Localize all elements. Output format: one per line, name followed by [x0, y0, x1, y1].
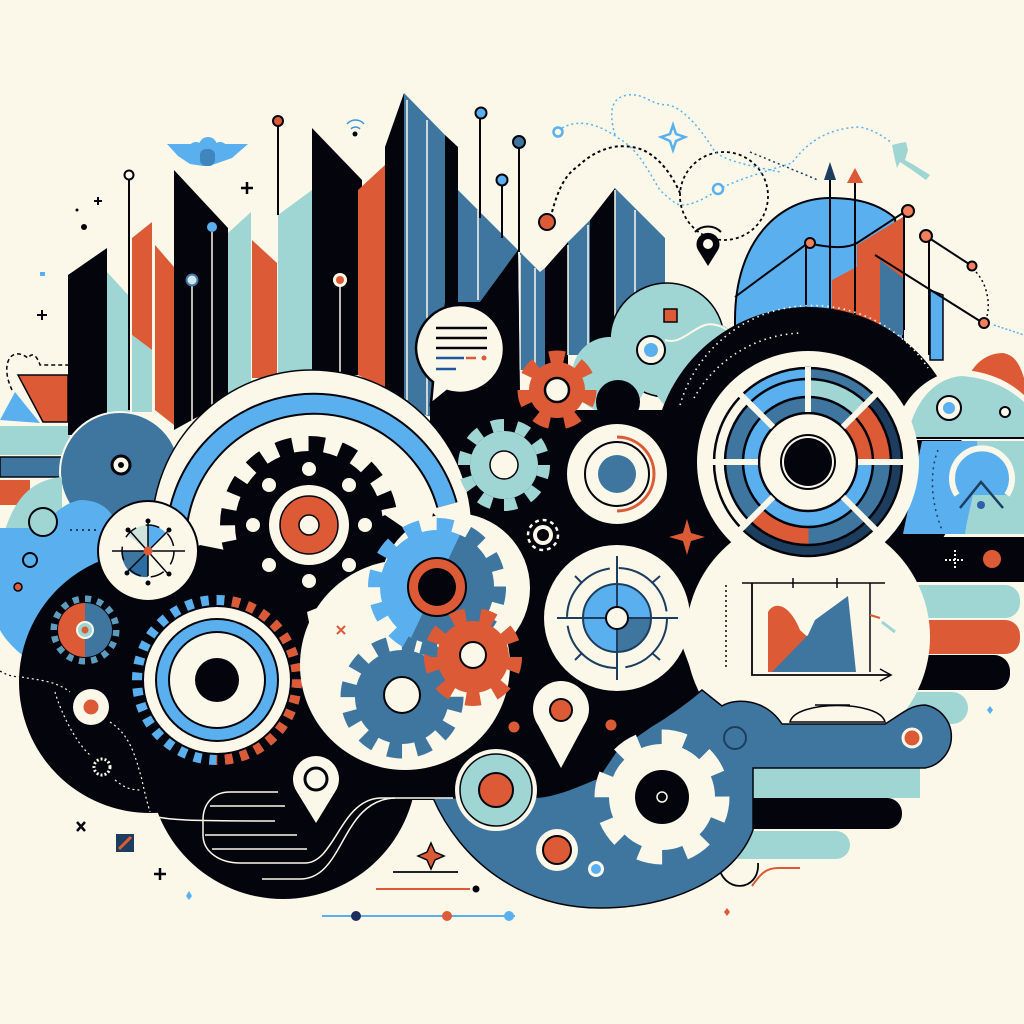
pill under chart	[790, 705, 885, 722]
small ring gear	[528, 520, 558, 550]
speech bubble	[416, 305, 504, 404]
icon: map pin top	[695, 226, 721, 266]
left stripes and triangle	[0, 354, 70, 505]
bottom timeline	[322, 911, 515, 921]
dotted routes top right	[539, 95, 1024, 335]
concentric dot	[455, 749, 537, 831]
icon: mint gear	[464, 425, 544, 505]
panel: mint cloud behind wheel	[572, 283, 750, 420]
black mass	[19, 250, 963, 899]
panel: left blobs	[0, 412, 180, 660]
icon: steel gear	[348, 643, 456, 751]
right stripes	[880, 585, 1020, 724]
target gear left	[137, 600, 297, 760]
centre cream blob with gears	[300, 513, 530, 770]
pin lower	[293, 756, 339, 823]
bottom star and lines	[376, 843, 480, 892]
panel: right side blob	[880, 353, 1024, 582]
panel: chart circle	[686, 515, 930, 759]
scattered marks	[37, 182, 993, 916]
icon: small sparkle	[661, 125, 685, 150]
flow lines	[152, 792, 453, 879]
pin centre	[508, 681, 616, 768]
steel blob lower right	[433, 690, 951, 908]
icon: blue gear	[375, 525, 499, 649]
panel: dome chart top right	[735, 162, 989, 360]
orange star	[669, 519, 705, 555]
icon: orange gear top	[524, 357, 590, 423]
bottom right stripes	[700, 766, 920, 886]
dotted paths left	[22, 677, 150, 812]
band indicators	[724, 727, 921, 749]
dotted arcs on black	[680, 306, 928, 405]
compass circle	[98, 501, 198, 601]
icon: light hammer shape	[892, 142, 930, 180]
icon: orange gear	[431, 615, 515, 699]
wheel chart	[684, 338, 932, 586]
cream circle with black gear	[100, 370, 510, 800]
small gear left	[54, 599, 116, 661]
icon: cream gear	[603, 738, 721, 856]
skyline pins	[124, 108, 525, 420]
cream ring dial	[567, 424, 667, 524]
skyline of bars	[68, 93, 665, 440]
crosshair circle	[544, 545, 690, 691]
icon: wifi signal	[347, 120, 364, 136]
icon: black gear	[228, 444, 390, 606]
small orange dot	[73, 689, 109, 725]
small dots in steel blob	[536, 829, 604, 877]
icon: winged emblem	[167, 137, 248, 166]
dark dotted path start	[0, 671, 22, 677]
